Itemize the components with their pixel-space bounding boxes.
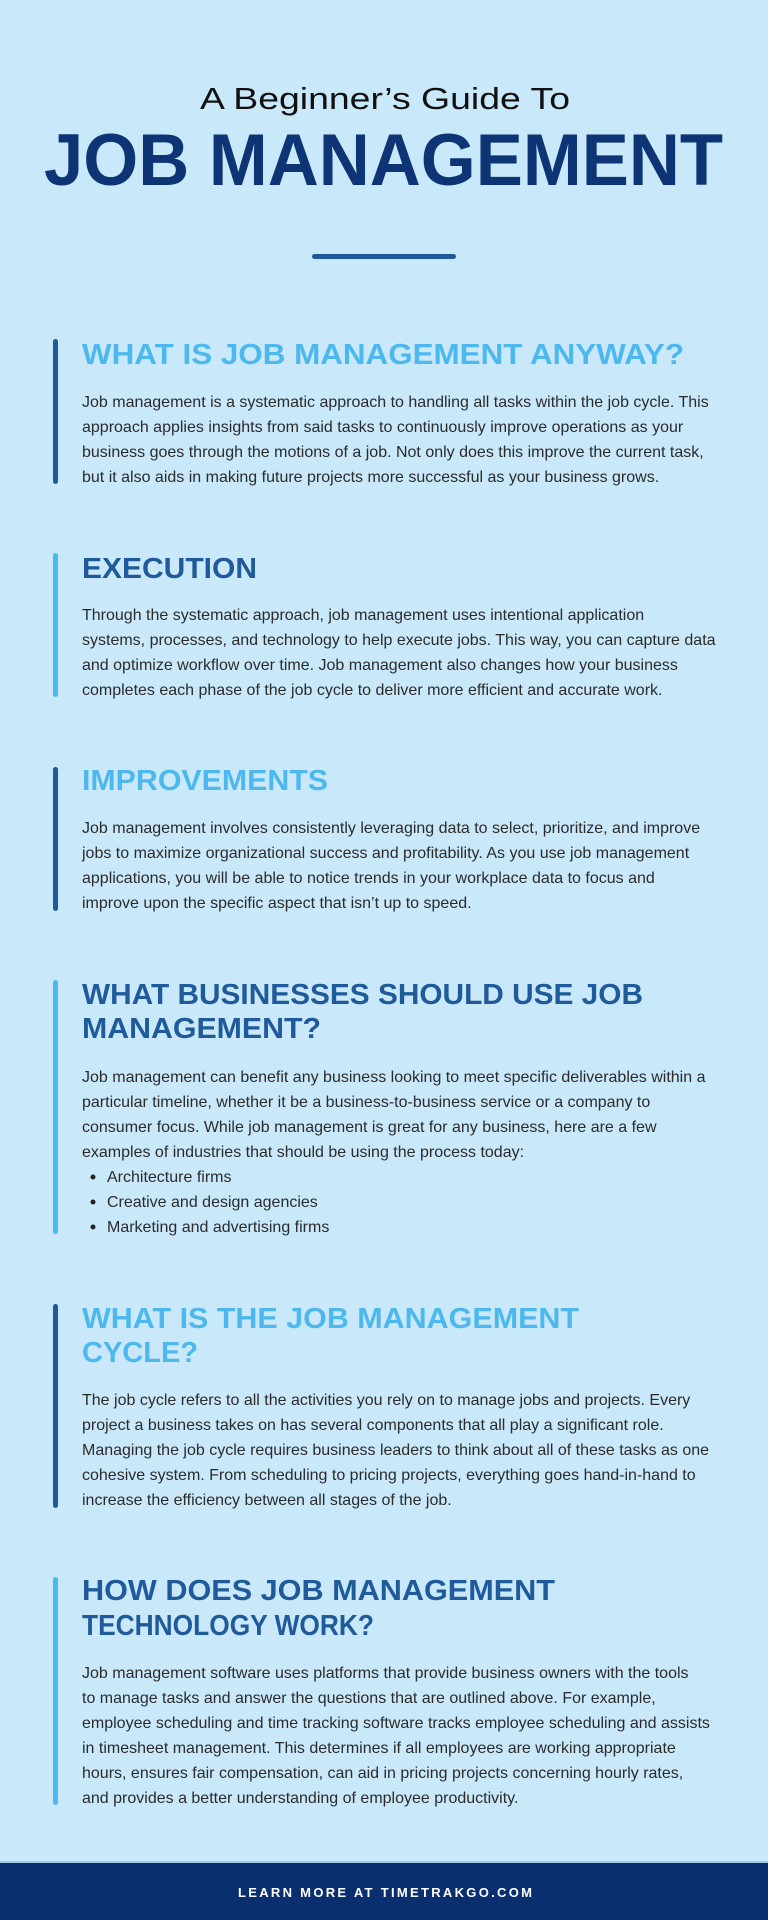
text block: technology: employee scheduling and time tracking software tracks employee scheduling and assists (82, 1715, 710, 1732)
heading: what businesses should use job management: WHAT BUSINESSES SHOULD USE JOB (82, 979, 643, 1011)
heading: improvements: IMPROVEMENTS (82, 765, 328, 797)
text block: improvements: Job management involves consistently leveraging data to select, prioritize, and improve (82, 820, 700, 837)
heading: how does job management technology work (82, 1575, 555, 1642)
title: JOB MANAGEMENT (44, 120, 723, 201)
text block: cycle: project a business takes on has several components that all play a significant role. (82, 1417, 664, 1434)
text block: technology: to manage tasks and answer the questions that are outlined above. For example, (82, 1690, 656, 1707)
heading: what is job management anyway: WHAT IS JOB MANAGEMENT ANYWAY? (82, 339, 684, 371)
heading: how does job management technology work: HOW DOES JOB MANAGEMENT (82, 1575, 555, 1607)
bullet list: industries: Creative and design agencies (107, 1194, 318, 1211)
text block: cycle: Managing the job cycle requires business leaders to think about all of these tasks as one (82, 1442, 709, 1459)
text block: definition: business goes through the motions of a job. Not only does this improve the current task, (82, 444, 704, 461)
panel: improvements (53, 765, 700, 912)
heading: what is the job management cycle: WHAT IS THE JOB MANAGEMENT (82, 1303, 579, 1335)
heading: what is the job management cycle (82, 1303, 579, 1369)
panel: execution (53, 553, 716, 699)
text block: improvements: applications, you will be able to notice trends in your workplace data to focus and (82, 870, 655, 887)
text block: cycle: cohesive system. From scheduling to pricing projects, everything goes hand-in-hand to (82, 1467, 696, 1484)
footer text: LEARN MORE AT TIMETRAKGO.COM (238, 1885, 532, 1900)
text block: businesses: particular timeline, whether it be a business-to-business service or a company to (82, 1094, 650, 1111)
bullet list: industries: Marketing and advertising firms (107, 1219, 329, 1236)
text block: businesses: Job management can benefit any business looking to meet specific deliverables within a (82, 1069, 706, 1086)
heading: what is the job management cycle: CYCLE? (82, 1337, 198, 1369)
text block: definition: Job management is a systematic approach to handling all tasks within the job cycle. This (82, 394, 709, 411)
heading: execution: EXECUTION (82, 553, 257, 585)
heading: how does job management technology work: TECHNOLOGY WORK? (82, 1610, 374, 1642)
panel: what businesses should use (53, 979, 706, 1236)
text block: cycle (82, 1392, 709, 1509)
bullet list: industries: Architecture firms (107, 1169, 231, 1186)
text block: cycle: The job cycle refers to all the activities you rely on to manage jobs and projects. Every (82, 1392, 690, 1409)
text block: execution: systems, processes, and technology to help execute jobs. This way, you can capture data (82, 632, 716, 649)
heading: what businesses should use job management: MANAGEMENT? (82, 1013, 321, 1045)
text block: definition: approach applies insights from said tasks to continuously improve operations as your (82, 419, 684, 436)
text block: improvements: improve upon the specific aspect that isn’t up to speed. (82, 895, 472, 912)
subtitle: A Beginner’s Guide To (200, 81, 570, 116)
text block: definition: but it also aids in making future projects more successful as your business grows. (82, 469, 659, 486)
text block: technology: in timesheet management. This determines if all employees are working appropriate (82, 1740, 676, 1757)
text block: cycle: increase the efficiency between all stages of the job. (82, 1492, 452, 1509)
text block: execution: Through the systematic approach, job management uses intentional application (82, 607, 644, 624)
panel: what is job management anyway (53, 339, 709, 486)
text block: businesses: consumer focus. While job management is great for any business, here are a few (82, 1119, 657, 1136)
text block: businesses (82, 1069, 706, 1161)
heading: what businesses should use job management (82, 979, 643, 1045)
text block: technology: Job management software uses platforms that provide business owners with the tools (82, 1665, 689, 1682)
text block: definition (82, 394, 709, 486)
text block: improvements: jobs to maximize organizational success and profitability. As you use job management (81, 845, 690, 862)
text block: execution (82, 607, 716, 699)
text block: improvements (81, 820, 700, 912)
panel: how does technology work (53, 1575, 710, 1807)
text block: technology: and provides a better understanding of employee productivity. (82, 1790, 518, 1807)
text block: technology (82, 1665, 710, 1807)
text block: execution: and optimize workflow over time. Job management also changes how your business (82, 657, 678, 674)
panel: job management cycle (53, 1303, 709, 1509)
text block: technology: hours, ensures fair compensation, can aid in pricing projects concerning hourly rates, (82, 1765, 683, 1782)
text block: businesses: examples of industries that should be using the process today: (82, 1144, 524, 1161)
text block: execution: completes each phase of the job cycle to deliver more efficient and accurate work. (82, 682, 662, 699)
bullet list: industries (90, 1169, 329, 1236)
footer (0, 1861, 768, 1920)
